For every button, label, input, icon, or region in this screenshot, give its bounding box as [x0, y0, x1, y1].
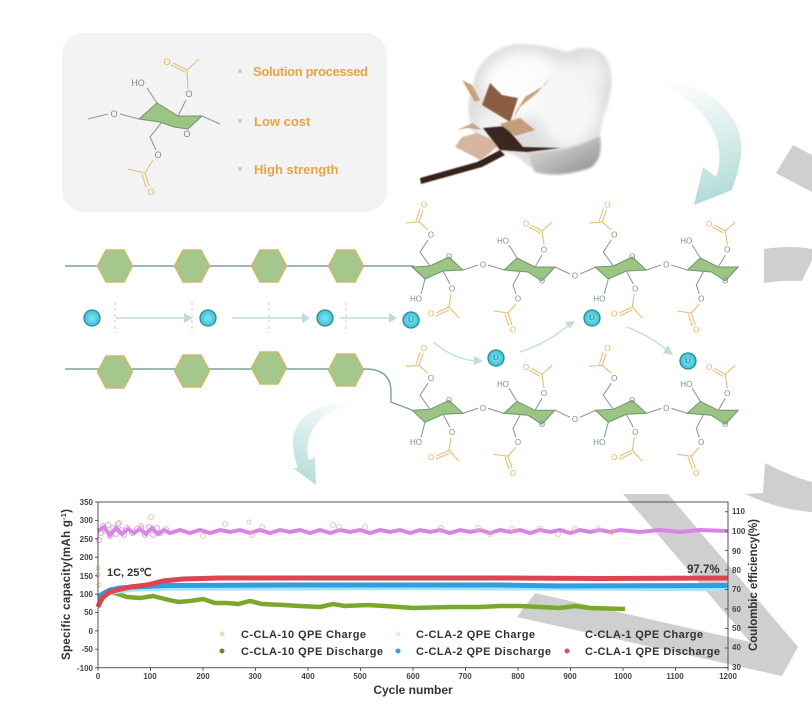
watermark: grey S shape: [517, 145, 812, 676]
lithium ion transport: hopping path: Li: [589, 314, 595, 322]
bottom axis labels: 400: [301, 672, 315, 681]
molecule row 1: unit 2: O: [539, 276, 545, 286]
series: C-CLA-2 discharge: [98, 585, 728, 597]
molecule: cellulose acetate unit: O: [163, 57, 171, 67]
arrow: cotton to polymer: [655, 82, 741, 205]
molecule row 2: unit 1: O: [446, 396, 452, 405]
molecule: cellulose acetate unit: O: [185, 89, 193, 99]
molecule: cellulose acetate unit: [88, 57, 220, 197]
left axis labels: 200: [80, 553, 94, 562]
molecule row 2: unit 3: O: [611, 374, 617, 383]
left axis labels: 0: [89, 627, 94, 636]
polymer chain: bottom hexagons: [65, 352, 412, 410]
molecule: cellulose acetate unit: O: [147, 187, 155, 197]
illustration: cotton boll: [420, 44, 612, 184]
bottom axis labels: 100: [143, 672, 157, 681]
molecule row 1: unit 1: O: [446, 252, 452, 262]
legend: C-CLA-2 QPE Discharge: [416, 646, 551, 658]
molecule row 2: unit 1: [406, 344, 504, 462]
molecule row 1: unit 4: O: [693, 326, 699, 334]
right axis labels: 60: [732, 605, 741, 614]
molecule row 1: unit 1: O: [480, 260, 486, 270]
right axis labels: 90: [732, 547, 741, 556]
left axis labels: [77, 498, 94, 673]
bottom axis labels: 500: [353, 672, 367, 681]
bottom axis labels: 1200: [719, 672, 737, 681]
left axis labels: 150: [80, 572, 94, 581]
left axis labels: 350: [80, 498, 94, 507]
right axis labels: 80: [732, 566, 741, 575]
molecule row 2: unit 2: O: [523, 363, 529, 372]
molecule row 2: unit 2: O: [515, 438, 521, 447]
molecule row 1: unit 4: O: [698, 294, 704, 304]
molecule row 2: unit 2: O: [572, 415, 578, 424]
molecule row 2: unit 4: O: [698, 438, 704, 447]
molecule row 1: unit 2: O: [572, 272, 578, 280]
molecule row 1: unit 2: O: [510, 326, 516, 334]
right axis labels: 100: [732, 527, 746, 536]
left axis labels: 300: [80, 516, 94, 525]
series: C-CLA-1 discharge: [98, 578, 728, 607]
right axis labels: [732, 507, 746, 672]
molecule row 1: unit 2: O: [541, 246, 547, 254]
molecule row 2: unit 1: O: [421, 344, 427, 353]
molecule row 2: unit 4: O: [693, 469, 699, 478]
molecule row 2: unit 1: O: [449, 428, 455, 437]
right axis labels: 70: [732, 585, 741, 594]
y axis title left: ): [61, 509, 73, 513]
molecule row 2: unit 4: O: [706, 363, 712, 372]
molecule row 2: unit 4: HO: [680, 380, 692, 389]
molecule row 1: unit 4: [677, 220, 738, 334]
right axis labels: 50: [732, 624, 741, 633]
panel: cellulose acetate properties: [62, 33, 387, 212]
molecule row 1: unit 4: O: [722, 276, 728, 286]
molecule row 1: unit 1: O: [428, 310, 434, 318]
right axis labels: 110: [732, 507, 745, 516]
molecule row 1: unit 2: [494, 220, 596, 334]
molecule: cellulose acetate unit: HO: [131, 78, 145, 88]
property list: Low cost: [254, 114, 311, 129]
bottom axis labels: 200: [196, 672, 210, 681]
axes and ticks: [95, 502, 728, 671]
molecule row 2: unit 2: O: [539, 420, 545, 429]
left axis labels: 50: [84, 608, 94, 617]
molecule: cellulose acetate unit: O: [110, 109, 118, 119]
molecule row 1: unit 3: O: [632, 284, 638, 294]
x axis title: Cycle number: [373, 683, 453, 697]
molecule row 1: unit 3: [589, 200, 687, 318]
bottom axis labels: 600: [406, 672, 420, 681]
molecule row 2: unit 1: O: [428, 374, 434, 383]
bottom axis labels: 700: [458, 672, 472, 681]
bottom axis labels: 800: [511, 672, 525, 681]
molecule row 1: unit 4: HO: [680, 236, 692, 246]
molecule row 2: unit 1: O: [428, 453, 434, 462]
molecule row 1: unit 3: O: [611, 230, 617, 240]
bottom axis labels: 1100: [666, 672, 684, 681]
property list: Solution processed: [253, 64, 368, 79]
legend: [220, 629, 720, 658]
annotation: retention: 97.7%: [687, 564, 720, 576]
molecule row 2: unit 3: O: [629, 396, 635, 405]
molecule row 2: unit 3: O: [663, 404, 669, 413]
molecule row 1: unit 2: O: [523, 220, 529, 228]
lithium ion transport: linear path: [84, 302, 397, 333]
right axis labels: 30: [732, 663, 741, 672]
molecule row 1: unit 1: [406, 200, 504, 318]
legend: C-CLA-1 QPE Charge: [585, 629, 703, 641]
series: C-CLA-10 discharge: [99, 592, 625, 609]
legend: C-CLA-1 QPE Discharge: [585, 646, 720, 658]
y axis title right: Coulombic efficiency(%): [748, 519, 760, 651]
bottom axis labels: 300: [248, 672, 262, 681]
molecule row 2: unit 3: O: [632, 428, 638, 437]
molecule row 2: unit 4: O: [724, 389, 730, 398]
molecule row 2: unit 1: O: [480, 404, 486, 413]
molecule row 1: unit 1: O: [449, 284, 455, 294]
molecule row 2: unit 2: HO: [497, 380, 509, 389]
molecule row 1: unit 4: O: [724, 246, 730, 254]
property list: High strength: [254, 162, 339, 177]
molecule row 1: unit 3: O: [629, 252, 635, 262]
lithium ion transport: hopping path: Li: [493, 354, 499, 362]
property list: [238, 64, 368, 177]
molecule row 1: unit 3: O: [663, 260, 669, 270]
polymer chain: top hexagons: [65, 250, 414, 282]
bottom axis labels: 900: [563, 672, 577, 681]
chart: cycling performance: [61, 498, 760, 697]
lithium ion transport: hopping path: [403, 310, 696, 369]
bottom axis labels: 1000: [614, 672, 632, 681]
left axis labels: -100: [77, 664, 94, 673]
molecule: cellulose acetate unit: O: [154, 150, 162, 160]
molecule row 1: unit 3: HO: [593, 294, 605, 304]
molecule row 2: unit 4: [677, 363, 738, 478]
molecule row 1: unit 3: O: [611, 310, 617, 318]
series: C-CLA-2 charge halo: [110, 586, 728, 591]
molecule: cellulose acetate unit: O: [183, 129, 191, 139]
molecule row 2: unit 3: [589, 344, 687, 462]
left axis labels: 250: [80, 535, 94, 544]
molecule row 2: unit 3: O: [604, 344, 610, 353]
y axis title left: Specific capacity(mAh g: [61, 520, 73, 660]
legend: C-CLA-10 QPE Charge: [241, 629, 366, 641]
molecule row 2: unit 3: HO: [593, 438, 605, 447]
molecule row 2: unit 2: [494, 363, 596, 478]
molecule row 2: unit 2: O: [510, 469, 516, 478]
molecule row 2: unit 1: HO: [410, 438, 422, 447]
legend: C-CLA-2 QPE Charge: [416, 629, 535, 641]
bottom axis labels: [96, 672, 737, 681]
bottom axis labels: 0: [96, 672, 101, 681]
annotation: rate and temperature: 1C, 25℃: [107, 567, 152, 579]
series: coulombic efficiency: [96, 514, 728, 587]
molecule row 1: unit 1: O: [428, 230, 434, 240]
molecule row 1: unit 1: HO: [410, 294, 422, 304]
legend: C-CLA-10 QPE Discharge: [241, 646, 383, 658]
lithium ion transport: hopping path: Li: [685, 358, 691, 364]
molecule row 2: unit 4: O: [722, 420, 728, 429]
y axis title left: -1: [61, 513, 68, 520]
lithium ion transport: hopping path: Li: [408, 316, 414, 324]
molecule row 2: unit 3: O: [611, 453, 617, 462]
molecule row 1: unit 2: O: [515, 294, 521, 304]
molecule row 1: unit 4: O: [706, 220, 712, 228]
left axis labels: -50: [81, 645, 94, 654]
molecule row 1: unit 3: O: [604, 200, 610, 210]
molecule row 1: unit 1: O: [421, 200, 427, 210]
right axis labels: 40: [732, 643, 741, 652]
arrow: polymer to battery data: [293, 403, 357, 485]
left axis labels: 100: [80, 590, 94, 599]
molecule row 2: unit 2: O: [541, 389, 547, 398]
molecule row 1: unit 2: HO: [497, 236, 509, 246]
